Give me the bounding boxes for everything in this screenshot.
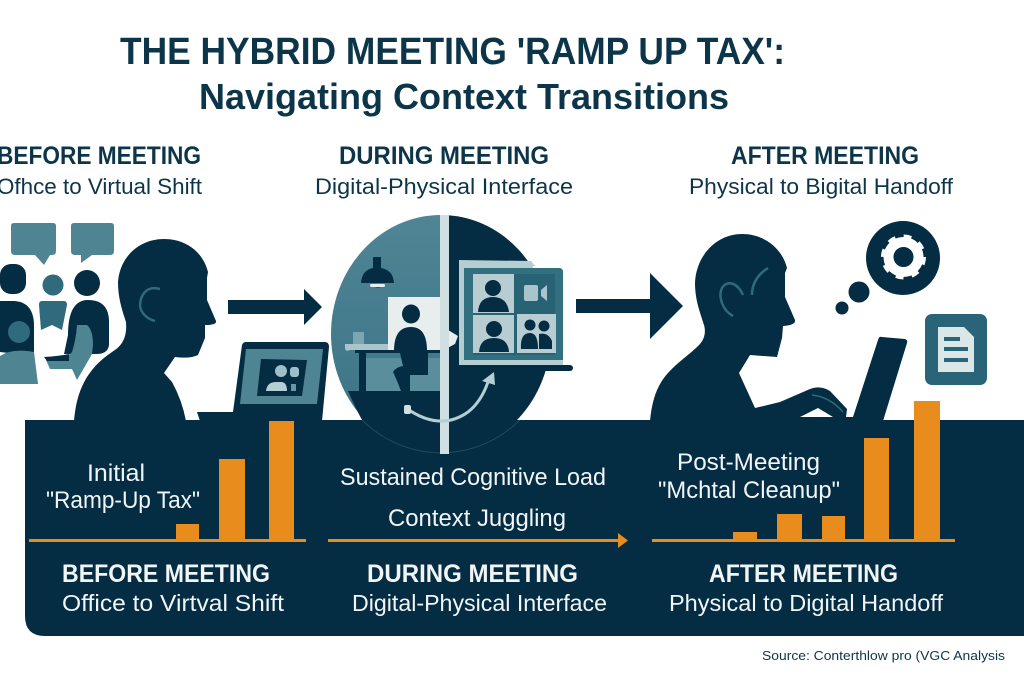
panel: dark base (25, 420, 1024, 636)
divider (440, 215, 449, 454)
arrow: before to during (228, 289, 322, 325)
arrow: during meeting timeline (328, 533, 628, 548)
icon: lamp (361, 257, 394, 288)
footer label: during meeting: DURING MEETING (367, 560, 578, 588)
title: THE HYBRID MEETING 'RAMP UP TAX': (120, 31, 785, 73)
label: post-meeting mental cleanup: "Mchtal Cleanup" (658, 477, 840, 504)
label: sustained cognitive load (340, 464, 606, 532)
footer label: after meeting: Physical to Digital Handoff (669, 590, 944, 616)
arrow: during to after (576, 273, 683, 339)
bar chart: after meeting (652, 401, 955, 542)
icon: left person silhouette (74, 239, 216, 421)
column header: before meeting: BEFORE MEETING (0, 142, 201, 170)
footer label: after meeting (669, 560, 944, 616)
column header: during meeting (315, 142, 573, 199)
column header: after meeting (689, 142, 954, 199)
column header: during meeting: DURING MEETING (339, 142, 549, 170)
footer label: before meeting: BEFORE MEETING (62, 560, 270, 588)
arrow: curved transition (404, 372, 495, 421)
icon: right person silhouette (650, 234, 907, 421)
title (120, 31, 785, 117)
column header: after meeting: Physical to Bigital Handoff (689, 174, 954, 199)
label: initial ramp-up tax: "Ramp-Up Tax" (46, 487, 200, 514)
column header: before meeting (0, 142, 202, 199)
label: post-meeting mental cleanup (658, 449, 840, 504)
label: sustained cognitive load: Sustained Cognitive Load (340, 464, 606, 491)
column header: during meeting: Digital-Physical Interface (315, 174, 573, 199)
column header: after meeting: AFTER MEETING (731, 142, 919, 170)
column header: before meeting: Ofhce to Virtual Shift (0, 174, 202, 199)
icon: left laptop (197, 342, 329, 421)
icon: split office and virtual circle (331, 215, 573, 454)
label: initial ramp-up tax: Initial (87, 460, 145, 487)
icon: colleagues with speech bubbles (0, 223, 114, 384)
label: post-meeting mental cleanup: Post-Meeting (677, 449, 820, 476)
footer label: after meeting: AFTER MEETING (709, 560, 898, 588)
label: initial ramp-up tax (46, 460, 200, 514)
footer label: before meeting: Office to Virtval Shift (62, 590, 285, 616)
footer label: during meeting (352, 560, 607, 616)
label: sustained cognitive load: Context Juggling (388, 505, 566, 532)
icon: document (925, 314, 987, 385)
source note: Source: Conterthlow pro (VGC Analysis (762, 648, 1006, 663)
video call window (459, 260, 573, 371)
footer label: before meeting (62, 560, 285, 616)
bar chart: before meeting (29, 421, 306, 542)
footer label: during meeting: Digital-Physical Interface (352, 590, 607, 616)
icon: thought bubble with gear (836, 221, 940, 314)
title: Navigating Context Transitions (199, 76, 729, 117)
office worker at desk (345, 297, 458, 391)
